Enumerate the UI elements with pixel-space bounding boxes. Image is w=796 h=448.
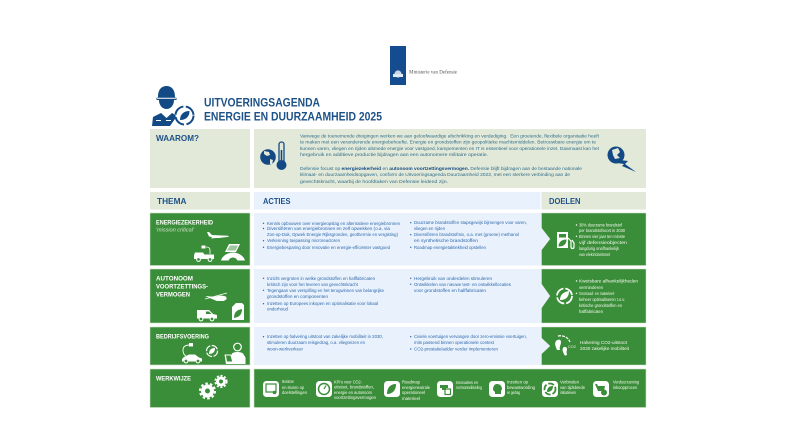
list: acties links: Energiebesparing door renovatie en energie-efficiënter vastgoed — [267, 245, 390, 251]
title: UITVOERINGSAGENDA — [204, 95, 320, 109]
list: doelen energiezekerheid: langdurig onafhankelijk — [579, 246, 619, 252]
item: monitoren: en sturen op — [282, 385, 304, 391]
item: KPI's — [316, 380, 376, 401]
item: KPI's: uitstoot, brandstoffen, — [334, 384, 374, 390]
list: acties rechts — [410, 276, 512, 294]
list: acties links — [263, 276, 384, 312]
logo: Ministerie van Defensie: Ministerie van Defensie — [409, 71, 458, 76]
panel: thema autonoom voortzettingsvermogen: VERMOGEN — [156, 291, 190, 298]
list: doelen autonoom voortzettingsvermogen: Kwetsbare afhankelijkheden — [579, 278, 638, 284]
text block: waarom: te maken met een veranderende energiebehoefte. Energie en grondstoffen zijn geopolitieke machtsmiddelen. Betrouwbare energie om te — [300, 140, 596, 146]
list: doelen autonoom voortzettingsvermogen — [576, 278, 638, 315]
text block: doel bedrijfsvoering: Halvering CO2-uitstoot — [580, 340, 628, 346]
list: acties links: Inzicht vergroten in welke grondstoffen en halffabricaten — [267, 276, 375, 282]
list: acties rechts: Duurzame brandstoffen stapsgewijs bijmengen voor varen, — [414, 220, 527, 226]
text block: waarom: kunnen varen, vliegen en rijden alsmede energie voor vastgoed, kampementen en IT is essentieel voor operationele inzet. Daarnaast kan het — [300, 146, 600, 152]
icon: jerrycan with leaf — [232, 303, 244, 320]
text block: waarom: Vanwege de toenemende dreigingen werken we aan geloofwaardige afschrikking en verdediging. Een groeiende, flexibele organisatie heeft — [300, 134, 600, 140]
icon: fuel pump with leaf — [557, 232, 574, 248]
list: doelen energiezekerheid: 30% duurzame brandstof — [579, 222, 623, 228]
item: innovaties: Innovaties en — [456, 380, 478, 386]
icon: van — [197, 310, 217, 321]
item: innovaties: normontwikkeling — [456, 385, 482, 391]
list: acties links: onderhoud — [267, 306, 288, 312]
item: bewustwording — [489, 380, 535, 397]
list: acties rechts: CO2-prestatieladder verder implementeren — [414, 346, 498, 352]
item: bewustwording: en gedrag — [507, 390, 520, 396]
item: verbinden: Verbinden — [560, 380, 579, 386]
item: innovaties — [437, 380, 482, 397]
panel: thema werkwijze: WERKWIJZE — [156, 375, 191, 382]
list: doelen energiezekerheid: per brandstofsoort in 2030 — [579, 228, 625, 234]
item: monitoren: Monitoren — [282, 379, 294, 385]
item: monitoren: doelstellingen — [282, 390, 307, 396]
panel: thema energiezekerheid: 'mission critical' — [156, 228, 195, 234]
list: acties rechts — [410, 220, 527, 251]
icon: soldier with recycling circle — [152, 86, 194, 126]
list: acties links: Inzetten op Europees inkopen en optimalisatie voor lokaal — [267, 301, 378, 307]
text block: doel bedrijfsvoering — [580, 340, 630, 352]
icon: electric car — [182, 343, 202, 363]
text block: waarom: gevechtskracht, waarbij de hoofdtaken van Defensie leidend zijn. — [300, 179, 448, 185]
panel: doel autonoom voortzettingsvermogen — [542, 269, 646, 323]
list: doelen energiezekerheid: vijf defensieobjecten — [579, 240, 627, 246]
item: bewustwording: Inzetten op — [507, 380, 528, 386]
list: acties links: grondstoffen en componenten — [267, 294, 328, 300]
list: acties links: Kennis opbouwen over energieopslag en alternatieve energiebronnen — [267, 221, 400, 227]
list: acties links: Inzetten op halvering uitstoot van zakelijke mobiliteit in 2030, — [267, 334, 383, 340]
item: verduurzaming inkoop: Verduurzaming — [613, 380, 639, 386]
panel: thema bedrijfsvoering: BEDRIJFSVOERING — [156, 333, 209, 340]
text block: doel bedrijfsvoering: 2030 zakelijke mobiliteit — [580, 346, 630, 352]
icon: jet — [207, 232, 229, 238]
item: bewustwording: bewustwording — [507, 385, 535, 391]
panel: thema energiezekerheid — [150, 213, 250, 266]
panel: waarom text — [254, 129, 646, 188]
icon: helicopter — [205, 293, 227, 301]
panel: acties bedrijfsvoering — [254, 327, 550, 365]
icon: solar panel and shelter — [221, 244, 245, 260]
item: monitoren — [263, 379, 307, 397]
panel: thema werkwijze — [150, 369, 250, 408]
text block: waarom: Defensie focust op energiezekerheid en autonoom voortzettingsvermogen. Defensie blijft bijdragen aan de bestaande nationale — [300, 166, 582, 172]
list: doelen energiezekerheid — [576, 222, 627, 258]
panel: waarom heading — [150, 129, 250, 188]
panel: thema bedrijfsvoering — [150, 327, 250, 365]
text block: waarom: hergebruik en additieve productie bijdragen aan een autonomere militaire operatie. — [300, 152, 488, 158]
list: acties rechts: en synthetische brandstoffen — [414, 238, 478, 244]
item: roadmap — [384, 380, 430, 402]
list: acties rechts: Hergebruik van onderdelen stimuleren — [414, 276, 492, 282]
list: doelen autonoom voortzettingsvermogen: verminderen — [579, 285, 603, 291]
item: verbinden — [542, 380, 585, 397]
panel: acties header — [254, 192, 540, 210]
panel: doel bedrijfsvoering — [542, 327, 646, 365]
list: acties links — [263, 221, 400, 251]
item: verbinden: van tijdsbrede — [560, 385, 585, 391]
panel: thema header: THEMA — [157, 196, 186, 206]
item: verduurzaming inkoop: inkoopproces — [613, 385, 637, 391]
list: doelen autonoom voortzettingsvermogen: beheer optimaliseren t.o.v. — [579, 297, 625, 303]
panel: thema autonoom voortzettingsvermogen — [150, 269, 250, 323]
list: acties rechts: Roadmap energietaktiekheid opstellen — [414, 245, 486, 251]
panel: thema header — [150, 192, 250, 210]
title — [204, 95, 382, 123]
list: doelen energiezekerheid: van elektriciteitsnet — [579, 252, 611, 258]
icon: footprint: CO2 — [568, 345, 576, 349]
text block: waarom — [300, 134, 600, 185]
text block: waarom: klimaat- en duurzaamheidsopgaven, conform de Uitvoeringsagenda Duurzaamheid 2023, met een sterkere verbinding aan de — [300, 172, 570, 178]
panel: thema energiezekerheid: ENERGIEZEKERHEID — [156, 220, 213, 226]
panel: werkwijze items — [254, 369, 646, 408]
icon: gears — [200, 376, 227, 398]
list: doelen autonoom voortzettingsvermogen: halffabricaten — [579, 309, 603, 315]
list: acties links: woon-werkverkeer — [267, 346, 303, 352]
item: KPI's: energie en autonoom — [334, 390, 372, 396]
panel: doelen header — [542, 192, 646, 210]
icon: globe with lightning — [608, 146, 636, 172]
panel: acties energiezekerheid — [254, 213, 550, 266]
icon: person at laptop — [224, 343, 246, 364]
list: acties links: Verkenning toepassing microreactoren — [267, 238, 340, 244]
list: acties rechts: Diversifiëren brandstofmix, o.a. met (groene) methanol — [414, 232, 519, 238]
icon: circular arrows with leaf — [557, 288, 572, 304]
item: roadmap: Roadmap — [402, 380, 420, 386]
list: acties rechts: voor grondstoffen en halffabricaten — [414, 288, 486, 294]
list: doelen autonoom voortzettingsvermogen: kritische grondstoffen en — [579, 303, 622, 309]
list: acties rechts — [410, 334, 527, 352]
icon: circular arrows — [206, 346, 218, 356]
icon: electric pickup — [194, 246, 214, 261]
panel: doelen header: DOELEN — [549, 196, 580, 206]
list: acties links: stimuleren duurzaam reisgedrag, o.a. vliegreizen en — [267, 340, 365, 346]
list: acties rechts: vliegen en rijden — [414, 226, 445, 232]
list: doelen energiezekerheid: Binnen vier jaar ten minste — [579, 234, 625, 240]
list: acties rechts: mits passend binnen operationele context — [414, 340, 495, 346]
logo: Ministerie van Defensie — [390, 46, 458, 85]
list: acties links: Zon-op-Dak, Opwek Energie Rijksgronden, geothermie en vergisting) — [267, 232, 398, 238]
item: verduurzaming inkoop — [593, 380, 639, 397]
panel: thema autonoom voortzettingsvermogen: AUTONOOM — [156, 275, 193, 282]
list: acties links: kritisch zijn voor het leveren van gevechtskracht — [267, 282, 359, 288]
item: KPI's: KPI's voor CO2- — [334, 380, 362, 386]
item: roadmap: energieneutrale — [402, 385, 430, 391]
list: acties links: Tegengaan van verspilling en het terugwinnen van belangrijke — [267, 288, 384, 294]
panel: doel energiezekerheid — [542, 213, 646, 266]
icon: globe and thermometer — [260, 142, 286, 170]
list: acties rechts: Ontwikkelen van nieuwe test- en ontwikkellocaties — [414, 282, 512, 288]
list: doelen autonoom voortzettingsvermogen: Voorraad- en materieel- — [579, 291, 615, 297]
panel: waarom heading: WAAROM? — [156, 133, 199, 143]
panel: thema autonoom voortzettingsvermogen: VOORTZETTINGS- — [156, 283, 208, 290]
list: acties links: Diversifiëren van energiebronnen en zelf opwekken (o.a. via — [267, 226, 390, 232]
list: acties links — [263, 334, 383, 352]
panel: acties header: ACTIES — [263, 196, 291, 206]
item: roadmap: materieel — [402, 396, 420, 402]
list: acties rechts: Civiele voertuigen vervangen door zero-emissie voertuigen, — [414, 334, 527, 340]
title: ENERGIE EN DUURZAAMHEID 2025 — [204, 109, 382, 123]
item: KPI's: voortzettingsvermogen — [334, 395, 376, 401]
item: roadmap: operationeel — [402, 390, 425, 396]
item: verbinden: initiatieven — [560, 390, 576, 396]
panel: acties autonoom voortzettingsvermogen — [254, 269, 550, 323]
